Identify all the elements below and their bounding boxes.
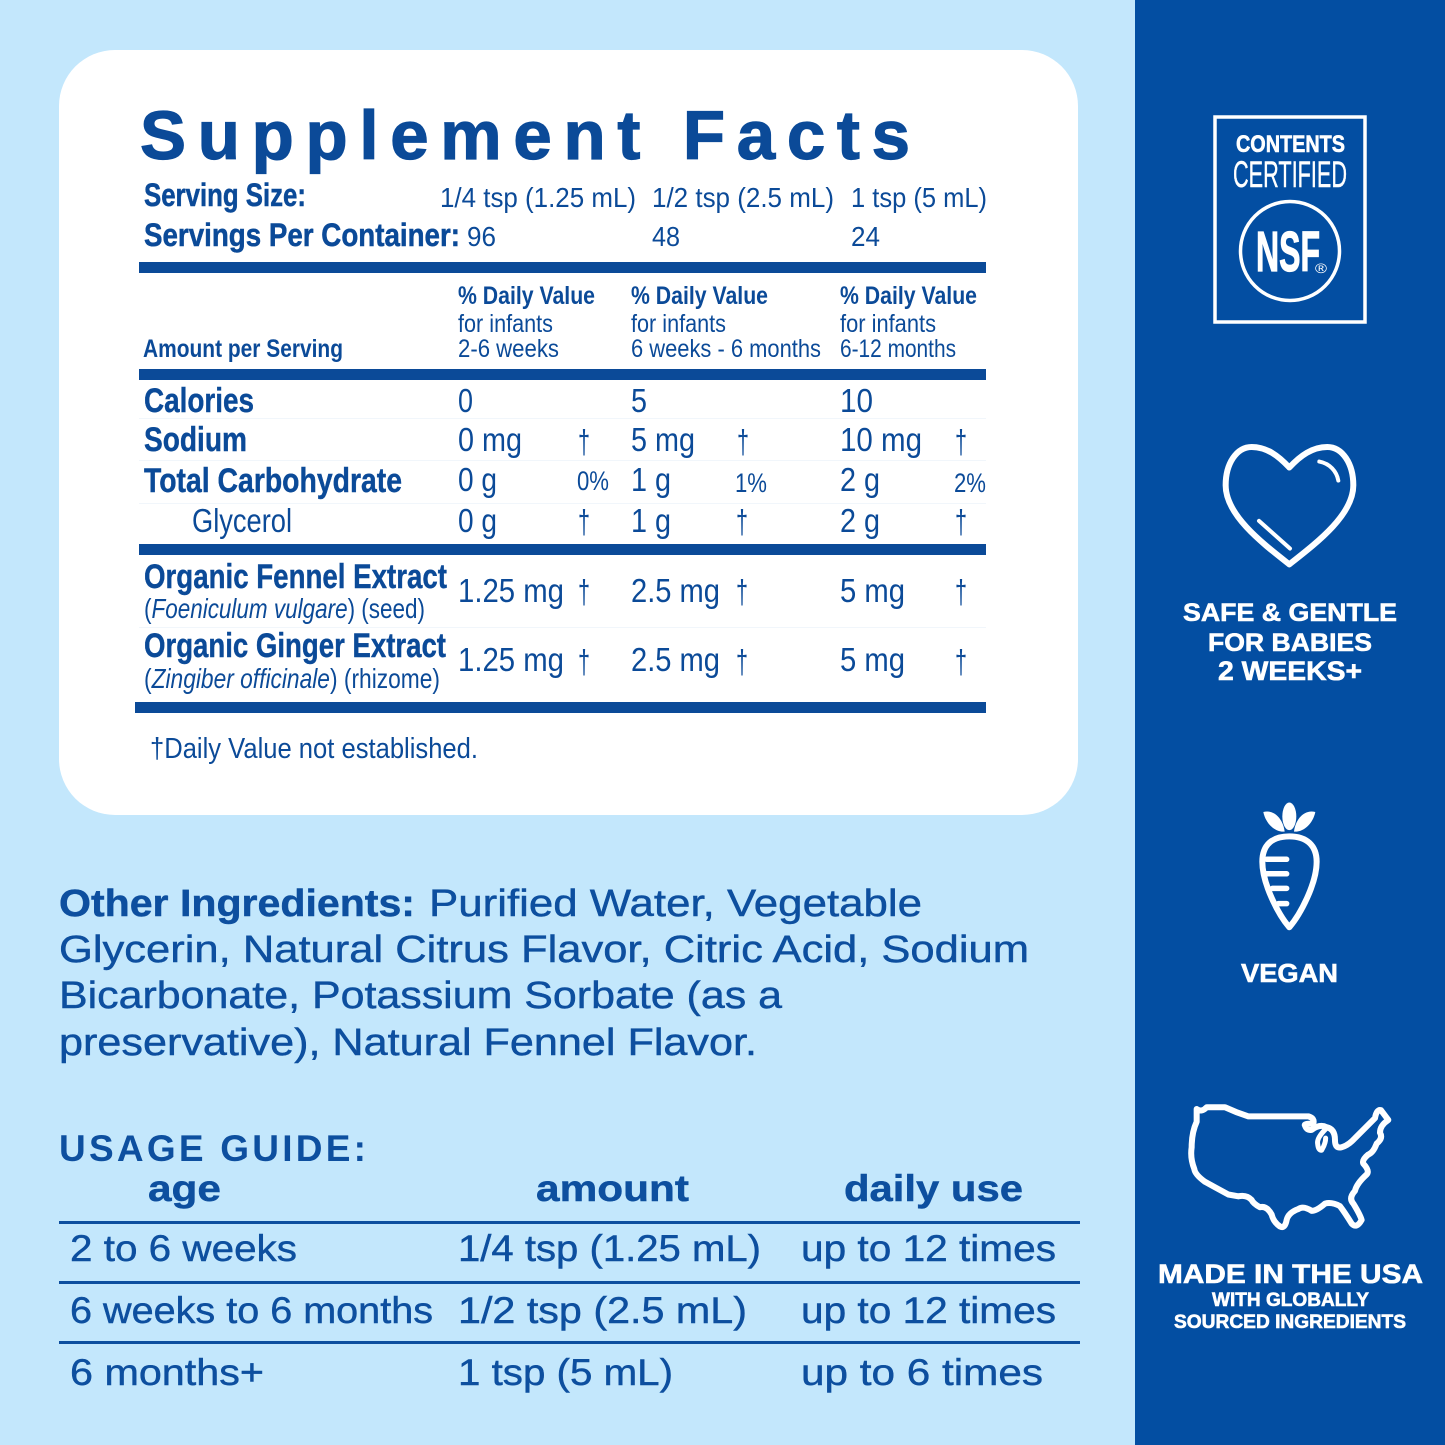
serving size row: 1/2 tsp (2.5 mL) <box>652 182 834 213</box>
row: calories: 5 <box>631 382 647 419</box>
row: organic ginger extract <box>144 627 967 694</box>
row: calories <box>144 382 873 420</box>
heading: usage guide: USAGE GUIDE: <box>59 1128 366 1169</box>
label: made in the USA <box>1158 1259 1423 1333</box>
servings per container row: 24 <box>851 221 880 252</box>
usage row: 6 months+: 6 months+ <box>70 1352 264 1393</box>
row: glycerol: 0 g <box>458 502 497 539</box>
panel: blue sidebar <box>1135 0 1445 1445</box>
column headers: % Daily Value <box>458 282 595 310</box>
row: sodium: Sodium <box>144 421 247 459</box>
label: made in the USA: MADE IN THE USA <box>1158 1259 1423 1289</box>
usage row: 2 to 6 weeks <box>70 1228 1056 1269</box>
usage row: 6 months+ <box>70 1352 1043 1393</box>
column headers: 6 weeks - 6 months <box>631 335 821 363</box>
column headers: 6-12 months <box>840 335 956 363</box>
text block: other ingredients: Bicarbonate, Potassium Sorbate (as a <box>59 975 783 1017</box>
text block: other ingredients: Purified Water, Vegetable <box>429 883 922 925</box>
servings per container row: 96 <box>467 221 496 252</box>
column headers: for infants <box>631 310 726 338</box>
row: organic fennel extract: † <box>955 573 967 610</box>
label: safe and gentle: SAFE & GENTLE <box>1183 599 1397 627</box>
column headers: % Daily Value <box>840 282 977 310</box>
text block: other ingredients <box>59 883 1029 1064</box>
row: glycerol: † <box>955 503 967 540</box>
badge: NSF contents certified: NSF <box>1256 220 1320 284</box>
column headers <box>143 282 977 363</box>
row: glycerol: Glycerol <box>192 502 292 539</box>
row: total carbohydrate: 1% <box>735 468 767 498</box>
row: organic fennel extract: 2.5 mg <box>631 572 720 609</box>
row: organic ginger extract: † <box>955 643 967 680</box>
label: safe and gentle: 2 WEEKS+ <box>1218 656 1362 686</box>
panel: supplement facts card <box>59 50 1078 815</box>
serving size row: 1/4 tsp (1.25 mL) <box>440 182 636 213</box>
usage row: 2 to 6 weeks: 2 to 6 weeks <box>70 1228 297 1269</box>
badge: NSF contents certified: ® <box>1315 260 1328 276</box>
row: total carbohydrate: 0 g <box>458 461 497 498</box>
serving size row: Serving Size: <box>144 177 306 213</box>
row: sodium: † <box>578 423 590 460</box>
row: sodium: † <box>737 423 749 460</box>
column headers: for infants <box>458 310 553 338</box>
column headers: 2-6 weeks <box>458 335 559 363</box>
row: glycerol <box>192 502 967 540</box>
badge: NSF contents certified: CONTENTS <box>1236 131 1345 158</box>
column headers: for infants <box>840 310 936 338</box>
row: organic ginger extract: † <box>736 643 748 680</box>
badge: NSF contents certified <box>1215 117 1365 322</box>
row: organic ginger extract: (Zingiber officinale) (rhizome) <box>144 663 440 694</box>
row: organic ginger extract: 5 mg <box>840 641 905 678</box>
row: organic fennel extract <box>144 558 967 624</box>
row: organic fennel extract: 5 mg <box>840 572 905 609</box>
servings per container row: 48 <box>652 221 680 252</box>
usage row: 6 months+: up to 6 times <box>801 1352 1043 1393</box>
usage row: 6 weeks to 6 months <box>70 1290 1056 1331</box>
row: organic ginger extract: 1.25 mg <box>458 641 564 678</box>
text block: other ingredients: Other Ingredients: <box>59 883 415 925</box>
badge: NSF contents certified: CERTIFIED <box>1233 154 1347 195</box>
row: glycerol: † <box>578 503 590 540</box>
heading: Supplement Facts: Supplement Facts <box>140 97 910 174</box>
text block: other ingredients: preservative), Natural Fennel Flavor. <box>59 1022 757 1064</box>
row: calories: 0 <box>458 382 473 419</box>
row: organic ginger extract: Organic Ginger Extract <box>144 627 446 665</box>
row: total carbohydrate: 2% <box>954 468 986 498</box>
servings per container row: Servings Per Container: <box>144 217 460 253</box>
row: organic fennel extract: (Foeniculum vulgare) (seed) <box>144 593 425 624</box>
row: total carbohydrate: 2 g <box>840 461 880 498</box>
table headers: age <box>148 1168 221 1209</box>
table headers: amount <box>536 1168 689 1209</box>
usage row: 6 weeks to 6 months: up to 12 times <box>801 1290 1056 1331</box>
row: organic fennel extract: † <box>578 573 590 610</box>
label: vegan: VEGAN <box>1241 958 1338 988</box>
row: sodium: 10 mg <box>840 421 922 458</box>
row: calories: 10 <box>840 382 873 419</box>
label: made in the USA: WITH GLOBALLY <box>1212 1290 1369 1311</box>
label: made in the USA: SOURCED INGREDIENTS <box>1174 1312 1406 1333</box>
serving size row <box>144 177 987 213</box>
row: glycerol: 1 g <box>631 502 671 539</box>
icon: heart <box>1226 447 1353 564</box>
column headers: Amount per Serving <box>143 335 343 363</box>
text block: other ingredients: Glycerin, Natural Citrus Flavor, Citric Acid, Sodium <box>59 929 1029 971</box>
footnote: †Daily Value not established. <box>150 733 478 765</box>
row: sodium: 5 mg <box>631 421 695 458</box>
row: organic fennel extract: 1.25 mg <box>458 572 564 609</box>
row: total carbohydrate <box>144 461 986 500</box>
label: safe and gentle: FOR BABIES <box>1208 629 1372 657</box>
usage row: 6 months+: 1 tsp (5 mL) <box>458 1352 673 1393</box>
icon: USA map <box>1191 1107 1388 1227</box>
table headers: daily use <box>844 1168 1023 1209</box>
row: sodium <box>144 421 967 460</box>
row: organic fennel extract: † <box>736 573 748 610</box>
row: organic fennel extract: Organic Fennel Extract <box>144 558 447 596</box>
icon: carrot <box>1262 803 1317 927</box>
column headers: % Daily Value <box>631 282 768 310</box>
servings per container row <box>144 217 880 253</box>
row: organic ginger extract: 2.5 mg <box>631 641 720 678</box>
usage row: 2 to 6 weeks: 1/4 tsp (1.25 mL) <box>458 1228 761 1269</box>
row: calories: Calories <box>144 382 254 420</box>
usage row: 6 weeks to 6 months: 1/2 tsp (2.5 mL) <box>458 1290 747 1331</box>
table headers <box>148 1168 1023 1209</box>
usage row: 2 to 6 weeks: up to 12 times <box>801 1228 1056 1269</box>
row: sodium: † <box>955 423 967 460</box>
row: organic ginger extract: † <box>578 643 590 680</box>
row: total carbohydrate: 0% <box>577 466 609 496</box>
row: glycerol: 2 g <box>840 502 880 539</box>
usage row: 6 weeks to 6 months: 6 weeks to 6 months <box>70 1290 433 1331</box>
serving size row: 1 tsp (5 mL) <box>851 182 987 213</box>
row: total carbohydrate: 1 g <box>631 461 671 498</box>
panel: usage guide table <box>59 1128 1080 1393</box>
row: total carbohydrate: Total Carbohydrate <box>144 462 402 500</box>
row: sodium: 0 mg <box>458 421 522 458</box>
row: glycerol: † <box>736 503 748 540</box>
label: safe and gentle <box>1183 599 1397 686</box>
